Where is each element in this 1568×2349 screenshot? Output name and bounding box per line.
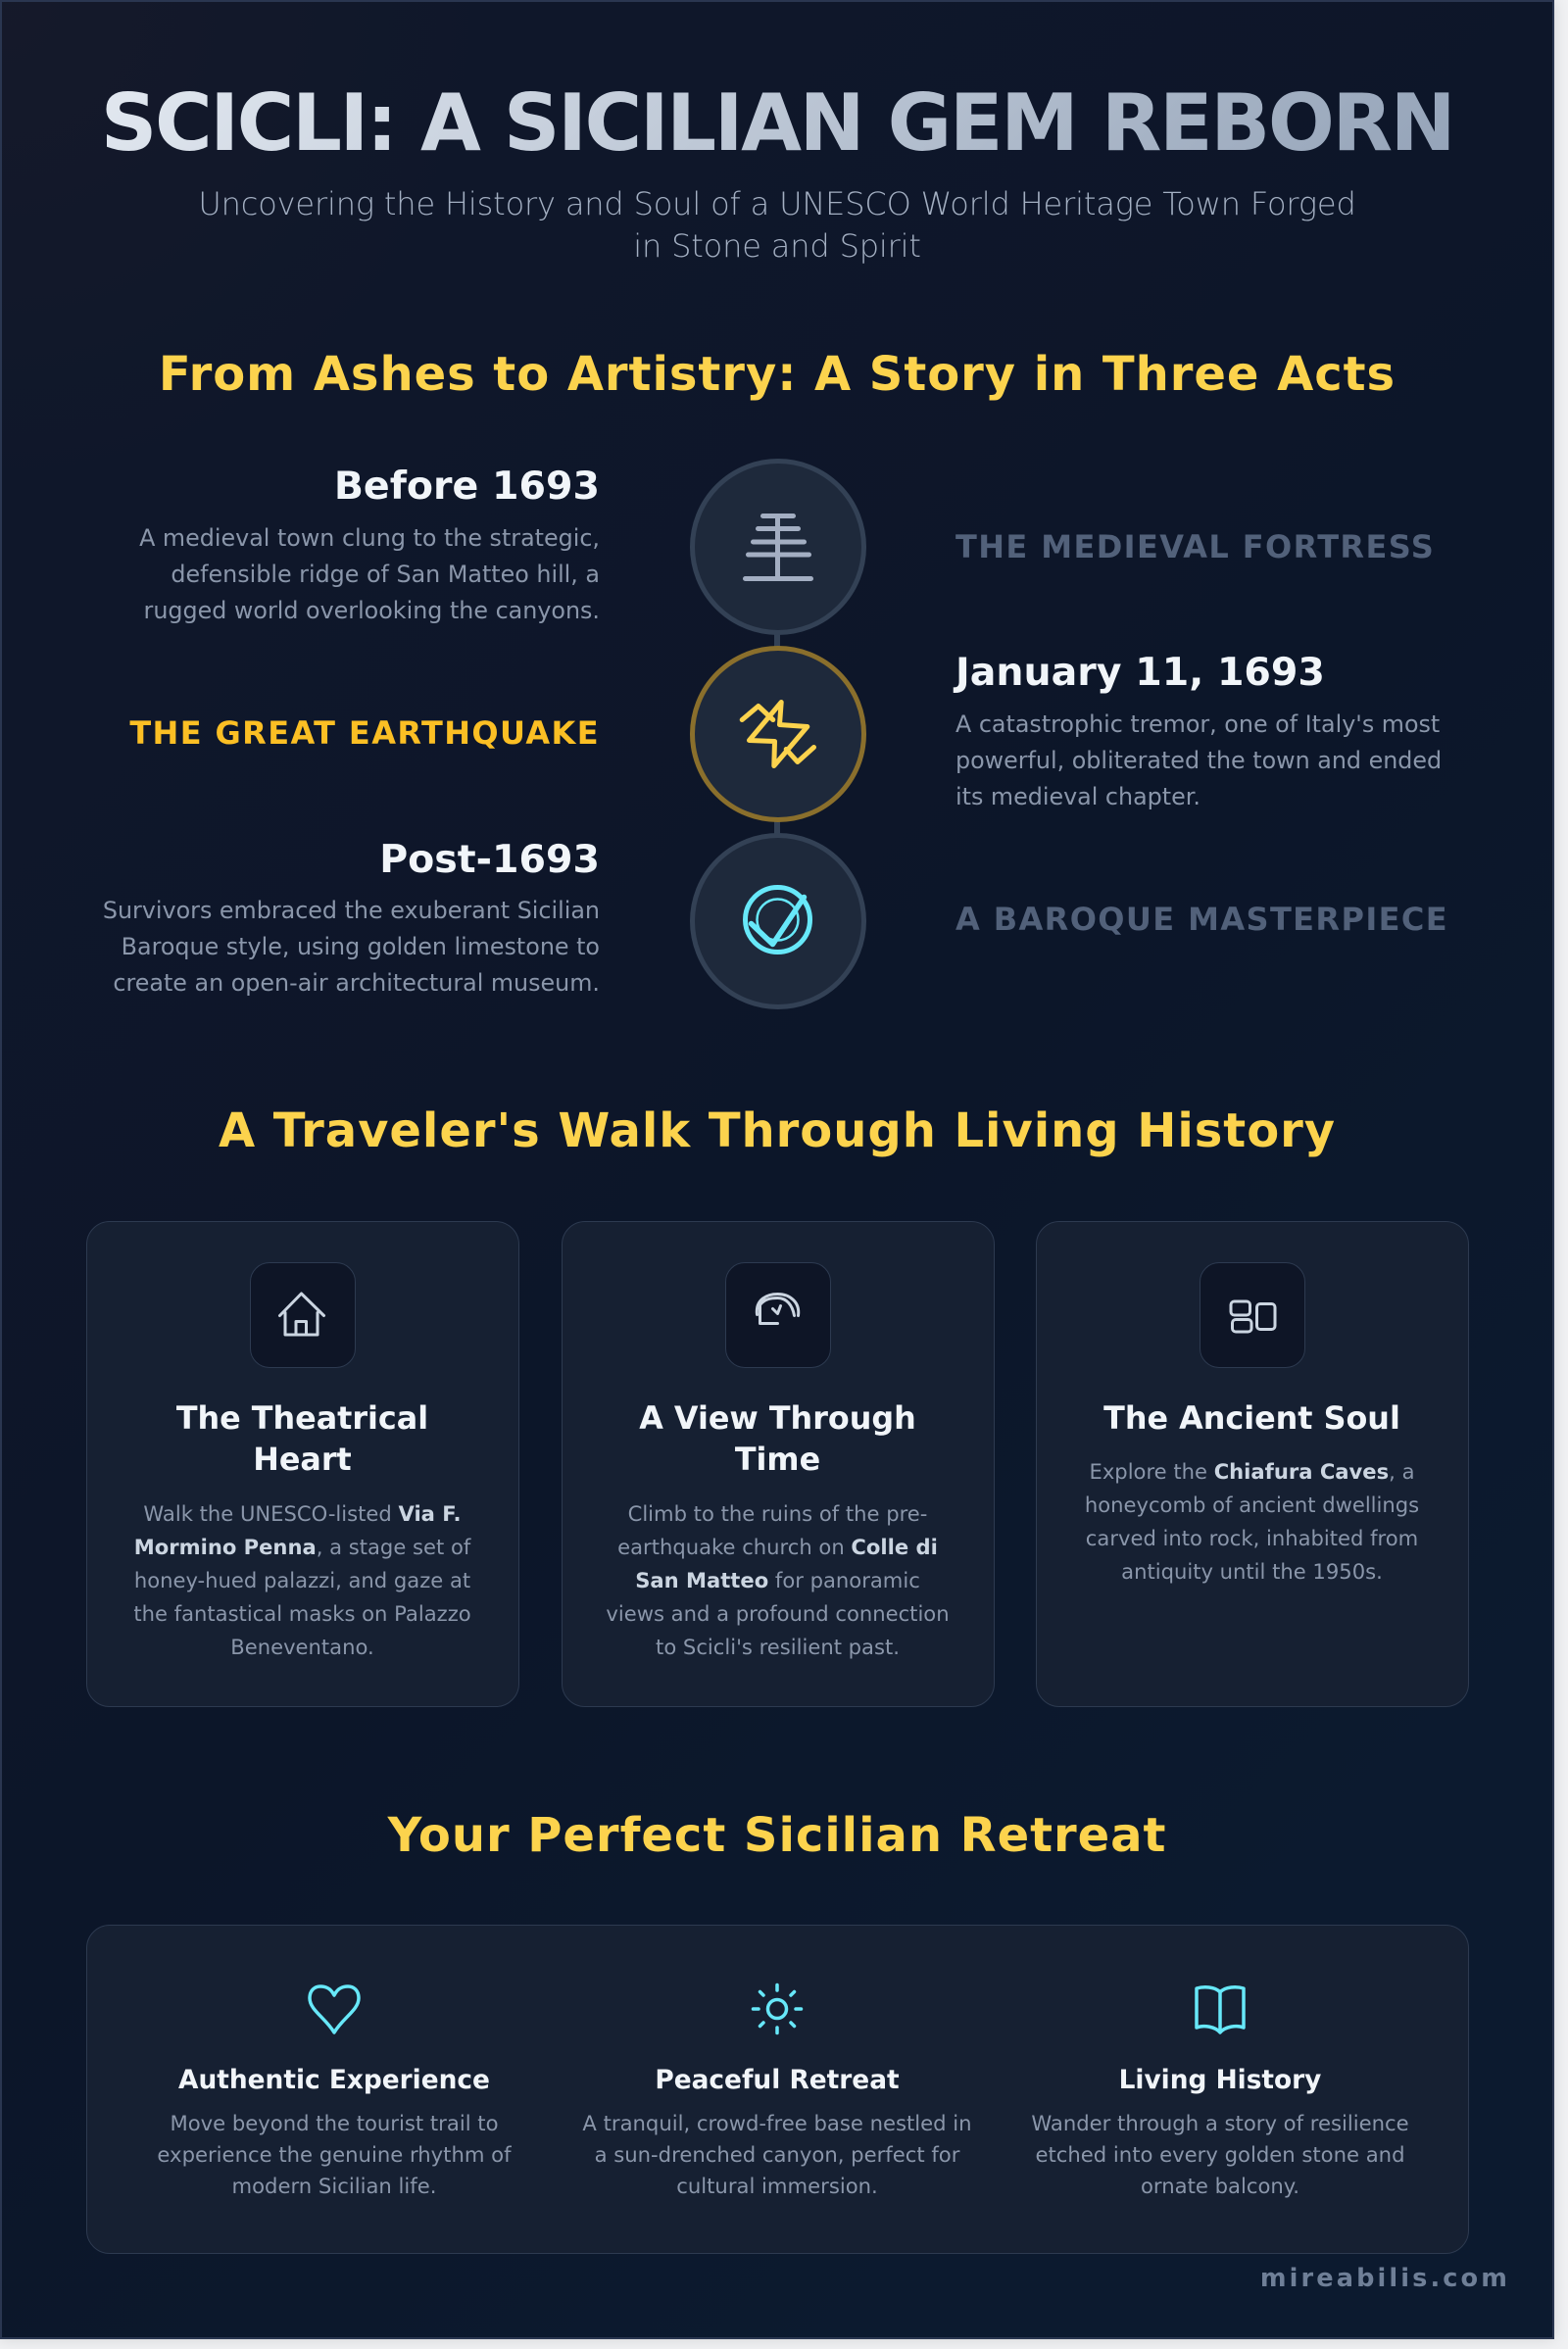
card title: The Ancient Soul bbox=[1103, 1400, 1400, 1437]
card text: honey-hued palazzi, and gaze at bbox=[134, 1568, 470, 1591]
benefit text bbox=[582, 2111, 972, 2197]
subtitle: Uncovering the History and Soul of a UNESCO World Heritage Town Forged bbox=[198, 185, 1356, 222]
card text: antiquity until the 1950s. bbox=[1121, 1559, 1383, 1584]
card text: Climb to the ruins of the pre- bbox=[628, 1501, 927, 1525]
benefit: living history bbox=[1031, 1985, 1409, 2197]
icon: check in circle bbox=[743, 885, 812, 954]
timeline node: medieval tower icon bbox=[690, 459, 866, 635]
act 2 description: its medieval chapter. bbox=[956, 782, 1200, 809]
benefit text: cultural immersion. bbox=[676, 2174, 878, 2197]
benefit text bbox=[1031, 2111, 1409, 2197]
act 1 description: A medieval town clung to the strategic, bbox=[139, 524, 600, 552]
benefit text: Wander through a story of resilience bbox=[1031, 2111, 1409, 2134]
card text: to Scicli's resilient past. bbox=[656, 1635, 900, 1658]
icon: lightning tremor bbox=[739, 700, 816, 768]
icon: sun bbox=[751, 1983, 804, 2034]
icon: arched clock bbox=[755, 1293, 800, 1325]
benefit title: Peaceful Retreat bbox=[655, 2065, 900, 2095]
card text: carved into rock, inhabited from bbox=[1086, 1526, 1418, 1550]
card text: Beneventano. bbox=[230, 1635, 374, 1658]
act 2 date: January 11, 1693 bbox=[956, 650, 1325, 695]
card text: views and a profound connection bbox=[606, 1601, 950, 1625]
panel: the ancient soul bbox=[1036, 1221, 1469, 1707]
timeline act 2: january 1693 bbox=[953, 650, 1442, 809]
card title: Time bbox=[735, 1442, 820, 1478]
card title bbox=[176, 1400, 428, 1478]
panel: retreat benefits bbox=[86, 1925, 1469, 2254]
heading: story in three acts: From Ashes to Artistry: A Story in Three Acts bbox=[159, 347, 1396, 402]
icon: heart bbox=[308, 1984, 361, 2034]
act 2 description bbox=[956, 710, 1442, 809]
card title: A View Through bbox=[639, 1400, 916, 1437]
card text bbox=[606, 1501, 950, 1658]
subtitle: in Stone and Spirit bbox=[633, 227, 921, 265]
benefit: peaceful retreat bbox=[582, 1983, 972, 2197]
act 1 date: Before 1693 bbox=[334, 464, 600, 509]
card title bbox=[639, 1400, 916, 1478]
benefit text: A tranquil, crowd-free base nestled in bbox=[582, 2111, 972, 2134]
panel: the theatrical heart bbox=[86, 1221, 519, 1707]
icon box: columns bbox=[1200, 1262, 1305, 1368]
subtitle bbox=[198, 185, 1356, 265]
card text: Walk the UNESCO-listed Via F. bbox=[143, 1501, 462, 1525]
benefit text: etched into every golden stone and bbox=[1035, 2142, 1405, 2166]
benefit title: Living History bbox=[1119, 2065, 1321, 2095]
timeline connector bbox=[774, 546, 780, 920]
card text: San Matteo for panoramic bbox=[635, 1568, 920, 1591]
timeline node: baroque icon bbox=[690, 833, 866, 1009]
timeline act 3: post-1693 bbox=[103, 837, 600, 997]
act 1 label: THE MEDIEVAL FORTRESS bbox=[956, 528, 1435, 565]
heading: perfect retreat: Your Perfect Sicilian Retreat bbox=[388, 1808, 1166, 1863]
card text: the fantastical masks on Palazzo bbox=[133, 1601, 471, 1625]
benefit text: a sun-drenched canyon, perfect for bbox=[595, 2142, 959, 2166]
benefit text bbox=[157, 2111, 512, 2197]
act 3 description bbox=[103, 897, 600, 997]
act 3 date: Post-1693 bbox=[379, 837, 600, 882]
heading: traveler's walk: A Traveler's Walk Through Living History bbox=[219, 1103, 1336, 1158]
icon: open book bbox=[1195, 1985, 1246, 2034]
timeline act 1: before 1693 bbox=[139, 464, 600, 624]
benefit text: experience the genuine rhythm of bbox=[157, 2142, 512, 2166]
benefit text: modern Sicilian life. bbox=[232, 2174, 436, 2197]
card title: The Theatrical bbox=[176, 1400, 428, 1437]
title: SCICLI: A SICILIAN GEM REBORN bbox=[101, 77, 1453, 169]
card text bbox=[1085, 1459, 1419, 1584]
icon box: house bbox=[249, 1262, 355, 1368]
act 2 description: A catastrophic tremor, one of Italy's most bbox=[956, 710, 1440, 737]
icon: house bbox=[278, 1292, 325, 1337]
benefit: authentic experience bbox=[157, 1984, 512, 2197]
watermark: mireabilis.com bbox=[1260, 2264, 1510, 2293]
card text: Explore the Chiafura Caves, a bbox=[1090, 1459, 1415, 1484]
panel: a view through time bbox=[562, 1221, 995, 1707]
act 2 label: THE GREAT EARTHQUAKE bbox=[129, 714, 600, 752]
icon: layout blocks bbox=[1229, 1299, 1276, 1333]
benefit title: Authentic Experience bbox=[178, 2065, 490, 2095]
act 3 description: Baroque style, using golden limestone to bbox=[122, 933, 600, 960]
card text: Mormino Penna, a stage set of bbox=[134, 1535, 470, 1558]
timeline node: earthquake icon bbox=[690, 645, 866, 821]
act 1 description: defensible ridge of San Matteo hill, a bbox=[171, 561, 600, 588]
act 1 description: rugged world overlooking the canyons. bbox=[144, 597, 600, 624]
act 1 description bbox=[139, 524, 600, 624]
act 3 description: Survivors embraced the exuberant Sicilian bbox=[103, 897, 600, 924]
benefit text: Move beyond the tourist trail to bbox=[170, 2111, 499, 2134]
benefit text: ornate balcony. bbox=[1141, 2174, 1299, 2197]
card title: Heart bbox=[253, 1442, 352, 1478]
icon box: gauge bbox=[725, 1262, 831, 1368]
card text bbox=[133, 1501, 471, 1658]
card text: honeycomb of ancient dwellings bbox=[1085, 1493, 1419, 1517]
act 2 description: powerful, obliterated the town and ended bbox=[956, 747, 1442, 774]
act 3 description: create an open-air architectural museum. bbox=[113, 969, 600, 997]
icon: tower bbox=[743, 514, 813, 581]
act 3 label: A BAROQUE MASTERPIECE bbox=[956, 901, 1448, 938]
card text: earthquake church on Colle di bbox=[617, 1535, 938, 1558]
